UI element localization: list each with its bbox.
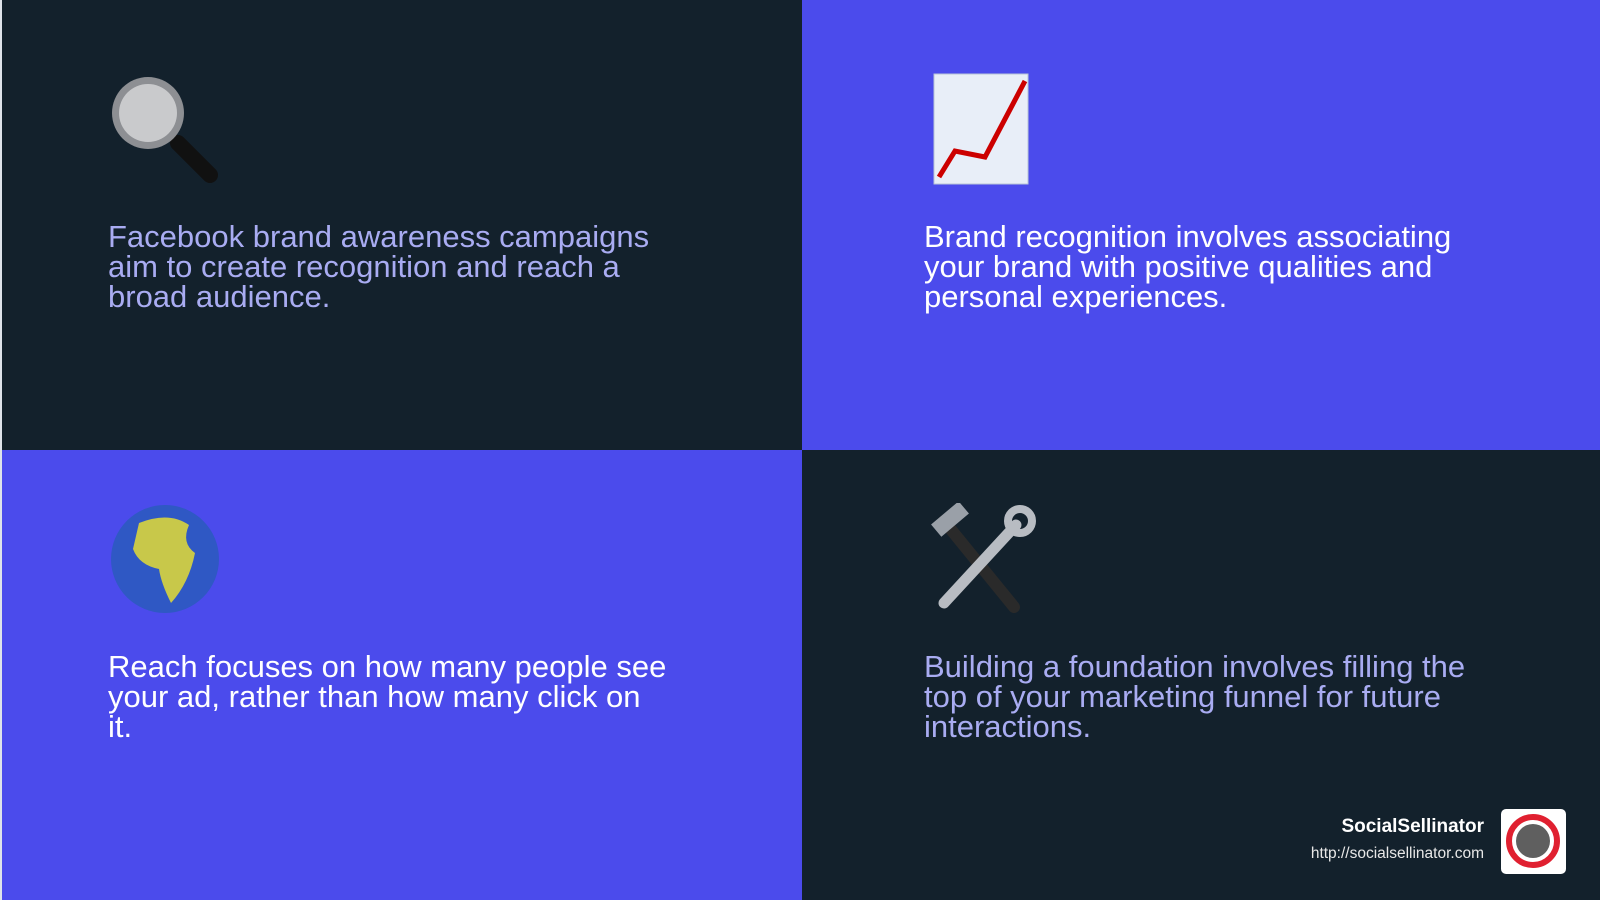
text: recognition: personal experiences. xyxy=(924,279,1227,314)
text: awareness xyxy=(108,219,649,314)
panel: top-left xyxy=(0,0,802,450)
icon: globe xyxy=(111,505,219,613)
panel: bottom-left xyxy=(0,450,802,900)
text: awareness: broad audience. xyxy=(108,279,330,314)
text: reach: your ad, rather than how many click on xyxy=(108,679,640,714)
brand name: SocialSellinator xyxy=(1341,816,1484,837)
icon: tools xyxy=(931,503,1036,613)
brand block xyxy=(1311,809,1566,874)
text: awareness: Facebook brand awareness campaigns xyxy=(108,219,649,254)
text: recognition: your brand with positive qualities and xyxy=(924,249,1432,284)
icon: magnifying glass xyxy=(112,77,218,183)
text: foundation: Building a foundation involves filling the xyxy=(924,649,1465,684)
icon: chart xyxy=(934,74,1028,184)
text: reach xyxy=(108,649,666,744)
text: reach: it. xyxy=(108,709,132,744)
logo xyxy=(1501,809,1566,874)
text: awareness: aim to create recognition and reach a xyxy=(108,249,620,284)
text: foundation: interactions. xyxy=(924,709,1091,744)
text: reach: Reach focuses on how many people see xyxy=(108,649,666,684)
url: http://socialsellinator.com xyxy=(1311,845,1484,862)
panel: bottom-right xyxy=(802,450,1600,900)
text: foundation xyxy=(924,649,1465,744)
text: recognition: Brand recognition involves associating xyxy=(924,219,1451,254)
panel: top-right xyxy=(802,0,1600,450)
text: foundation: top of your marketing funnel for future xyxy=(924,679,1441,714)
text: recognition xyxy=(924,219,1451,314)
